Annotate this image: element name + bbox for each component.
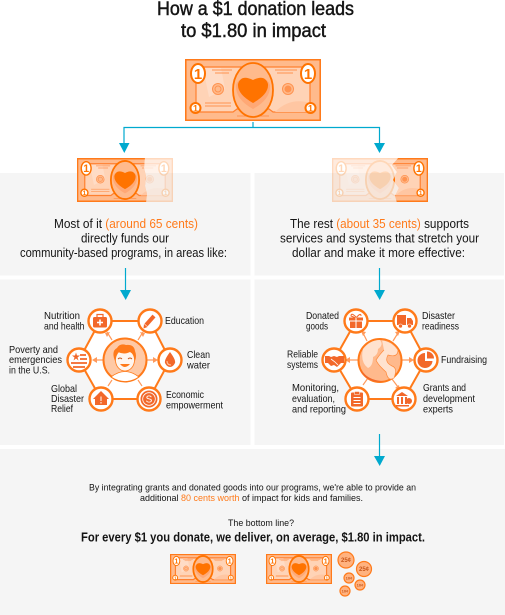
arrow: to program areas <box>120 268 131 300</box>
labels: services and systems: and reporting <box>292 404 346 416</box>
spokes <box>345 331 414 390</box>
panel: most of it <box>0 173 250 276</box>
labels: services and systems: Fundraising <box>441 354 487 366</box>
arrow: to services <box>374 268 385 300</box>
labels: services and systems: Monitoring, <box>292 382 339 394</box>
text: the rest: The rest (about 35 cents) supports <box>290 217 469 231</box>
labels: program areas: Education <box>165 315 204 327</box>
labels: services and systems: Reliable <box>287 348 318 360</box>
icon: coins <box>338 552 372 596</box>
labels: program areas <box>9 310 223 415</box>
icon: donated goods <box>344 310 368 332</box>
text: most of it: community-based programs, in areas like: <box>20 246 227 260</box>
text: most of it: directly funds our <box>81 232 169 246</box>
text: summary: For every $1 you donate, we deliver, on average, $1.80 in impact. <box>81 530 425 544</box>
panel: the rest <box>254 173 504 276</box>
labels: program areas: Poverty and <box>9 344 58 356</box>
icon: economic empowerment: S <box>146 394 153 406</box>
icon: coins: 25¢ <box>341 558 352 564</box>
labels: program areas: Disaster <box>51 393 84 405</box>
text: integrating grants: additional 80 cents worth of impact for kids and families. <box>140 493 363 504</box>
labels: program areas: Relief <box>51 403 73 415</box>
panel: program areas <box>0 280 250 445</box>
icon: child <box>104 338 146 382</box>
icon: coins: 25¢ <box>359 567 370 573</box>
text: integrating grants <box>89 482 416 504</box>
labels: services and systems: readiness <box>422 320 459 332</box>
labels: services and systems: evaluation, <box>292 393 335 405</box>
icon: grants and development experts <box>392 388 416 410</box>
icon: nutrition and health <box>88 310 112 332</box>
icon: globe <box>358 339 402 382</box>
labels: program areas: Clean <box>187 349 210 361</box>
labels: program areas: Economic <box>166 389 204 401</box>
text: most of it <box>20 217 227 260</box>
icon: monitoring and evaluation <box>346 388 368 410</box>
icon: reliable systems <box>322 348 346 372</box>
icon: coins: 10¢ <box>342 588 349 594</box>
text: the rest: services and systems that stretch your <box>280 232 479 246</box>
icon: bill 35 cents <box>333 159 427 201</box>
icon: second dollar bill <box>266 554 332 584</box>
labels: services and systems: Disaster <box>422 310 455 322</box>
labels: program areas: Nutrition <box>44 310 80 322</box>
chart: program hexagon <box>68 310 182 410</box>
labels: services and systems: development <box>423 393 475 405</box>
icon: coins: 10¢ <box>346 576 353 580</box>
panel: bottom line <box>0 449 505 615</box>
icon: fundraising <box>414 348 438 372</box>
icon: one dollar bill <box>186 60 320 120</box>
labels: program areas: Global <box>51 383 77 395</box>
labels: services and systems: goods <box>306 320 328 332</box>
icon: global disaster relief <box>90 388 112 410</box>
icon: education <box>138 310 162 332</box>
labels: program areas: emergencies <box>9 354 62 366</box>
labels: services and systems: Donated <box>306 310 339 322</box>
text: integrating grants: By integrating grants and donated goods into our programs, we're able to provide an <box>89 482 416 494</box>
labels: services and systems <box>287 310 487 416</box>
text: the rest: dollar and make it more effective: <box>292 246 465 260</box>
spokes <box>92 332 158 386</box>
arrow: split from dollar to both parts <box>119 122 385 153</box>
text: the bottom line: The bottom line? <box>228 518 294 529</box>
arrow: to bottom line <box>374 434 385 466</box>
title <box>157 0 354 42</box>
labels: program areas: in the U.S. <box>9 364 50 376</box>
icon: poverty and emergencies <box>68 348 90 372</box>
labels: services and systems: systems <box>287 359 318 371</box>
icon: bill 65 cents <box>78 159 172 201</box>
labels: program areas: and health <box>44 320 85 332</box>
title: to $1.80 in impact <box>181 21 327 42</box>
icon: disaster readiness <box>394 310 416 332</box>
chart: services hexagon <box>322 310 438 410</box>
panel: services and systems <box>254 280 504 445</box>
icon: clean water <box>158 348 182 372</box>
icon: first dollar bill <box>170 554 236 584</box>
icon: coins: 10¢ <box>357 582 364 588</box>
text: most of it: Most of it (around 65 cents) <box>54 217 198 231</box>
labels: services and systems: Grants and <box>423 382 466 394</box>
labels: services and systems: experts <box>423 404 453 416</box>
text: the rest <box>280 217 479 260</box>
labels: program areas: empowerment <box>166 400 223 412</box>
labels: program areas: water <box>186 360 210 372</box>
